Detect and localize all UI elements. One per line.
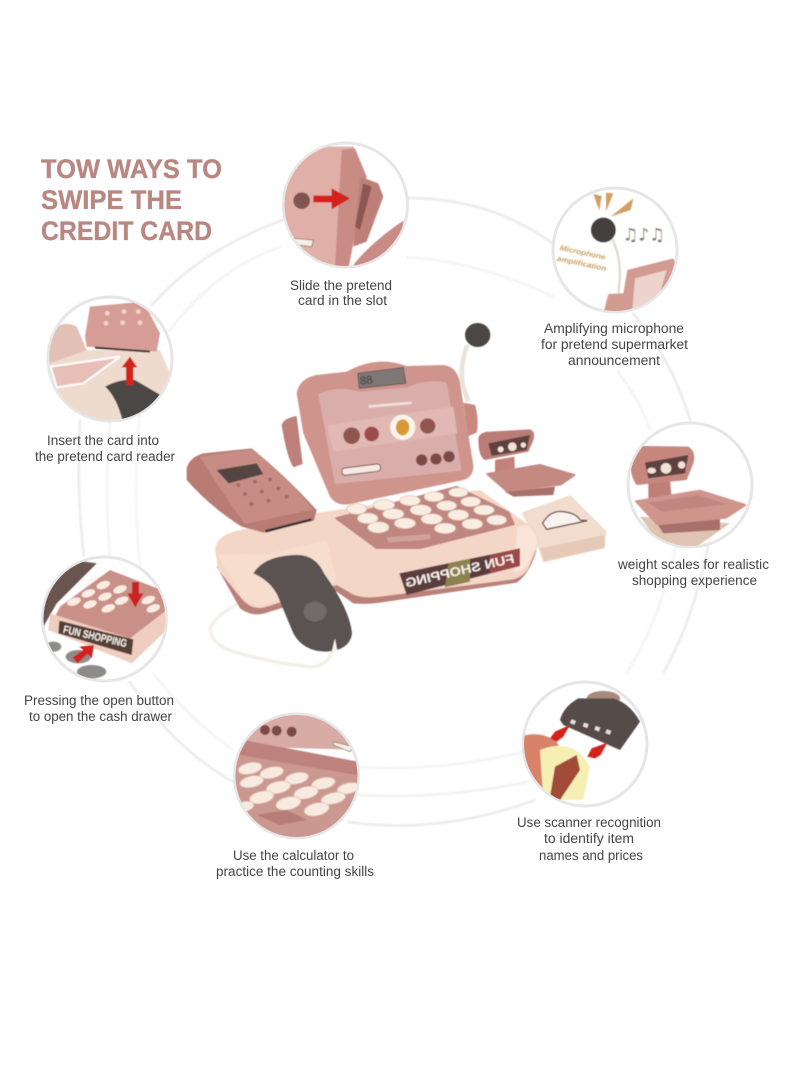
caption: microphone: for pretend supermarket [541, 337, 688, 352]
caption: calculator: practice the counting skills [216, 864, 374, 879]
caption: insert: Insert the card into [47, 433, 159, 448]
central cash register illustration [187, 323, 605, 667]
caption: cash drawer: Pressing the open button [24, 693, 174, 708]
card reader [187, 448, 317, 533]
LCD [358, 367, 406, 388]
scanner [253, 555, 352, 652]
keypad [337, 487, 513, 548]
caption: cash drawer: to open the cash drawer [29, 709, 172, 724]
caption: microphone: announcement [568, 353, 660, 368]
caption: insert: the pretend card reader [35, 449, 175, 464]
caption: slide: Slide the pretend [290, 278, 392, 293]
sign: fun shopping: FUN SHOPPING [404, 552, 516, 590]
cable [210, 605, 333, 667]
circle: microphone: Microphone [559, 243, 606, 262]
circle: calculator [233, 712, 360, 840]
caption: scanner: to identify item [544, 831, 634, 846]
small scale [478, 429, 574, 497]
caption: scanner: names and prices [539, 848, 643, 863]
caption: weight scale: weight scales for realistic [617, 557, 769, 572]
circle: scanner [520, 682, 647, 806]
screen icons [343, 427, 360, 444]
title [41, 154, 222, 246]
caption: scanner [517, 815, 661, 863]
title: CREDIT CARD [41, 216, 212, 246]
caption: cash drawer [24, 693, 174, 724]
circle: microphone [553, 188, 680, 317]
caption: microphone: Amplifying microphone [544, 321, 684, 336]
caption: scanner: Use scanner recognition [517, 815, 661, 830]
circle: microphone: amplification [556, 254, 608, 273]
caption: calculator [216, 848, 374, 879]
sign: fun shopping [399, 548, 520, 595]
caption: calculator: Use the calculator to [233, 848, 354, 863]
title: SWIPE THE [41, 185, 182, 215]
screen side slots [282, 416, 303, 467]
circle: weight scale [628, 423, 752, 547]
base [215, 490, 538, 608]
connecting rings [79, 198, 708, 826]
screen [297, 362, 473, 505]
microphone [462, 323, 490, 402]
caption: slide: card in the slot [298, 293, 387, 308]
scale base [523, 497, 605, 561]
caption: insert [35, 433, 175, 464]
title: TOW WAYS TO [41, 154, 222, 184]
screen: 88 [359, 374, 373, 388]
circle: cash drawer: FUN SHOPPING [62, 624, 128, 650]
caption: slide [290, 278, 392, 308]
caption: weight scale: shopping experience [632, 573, 757, 588]
circle: cash drawer [37, 557, 170, 681]
circle: slide card in slot [277, 143, 408, 270]
base shadow [217, 550, 537, 614]
caption: microphone [541, 321, 688, 368]
circle: insert card [43, 297, 180, 427]
circle: microphone: ♫♪♫ [623, 226, 665, 246]
caption: weight scale [617, 557, 769, 588]
